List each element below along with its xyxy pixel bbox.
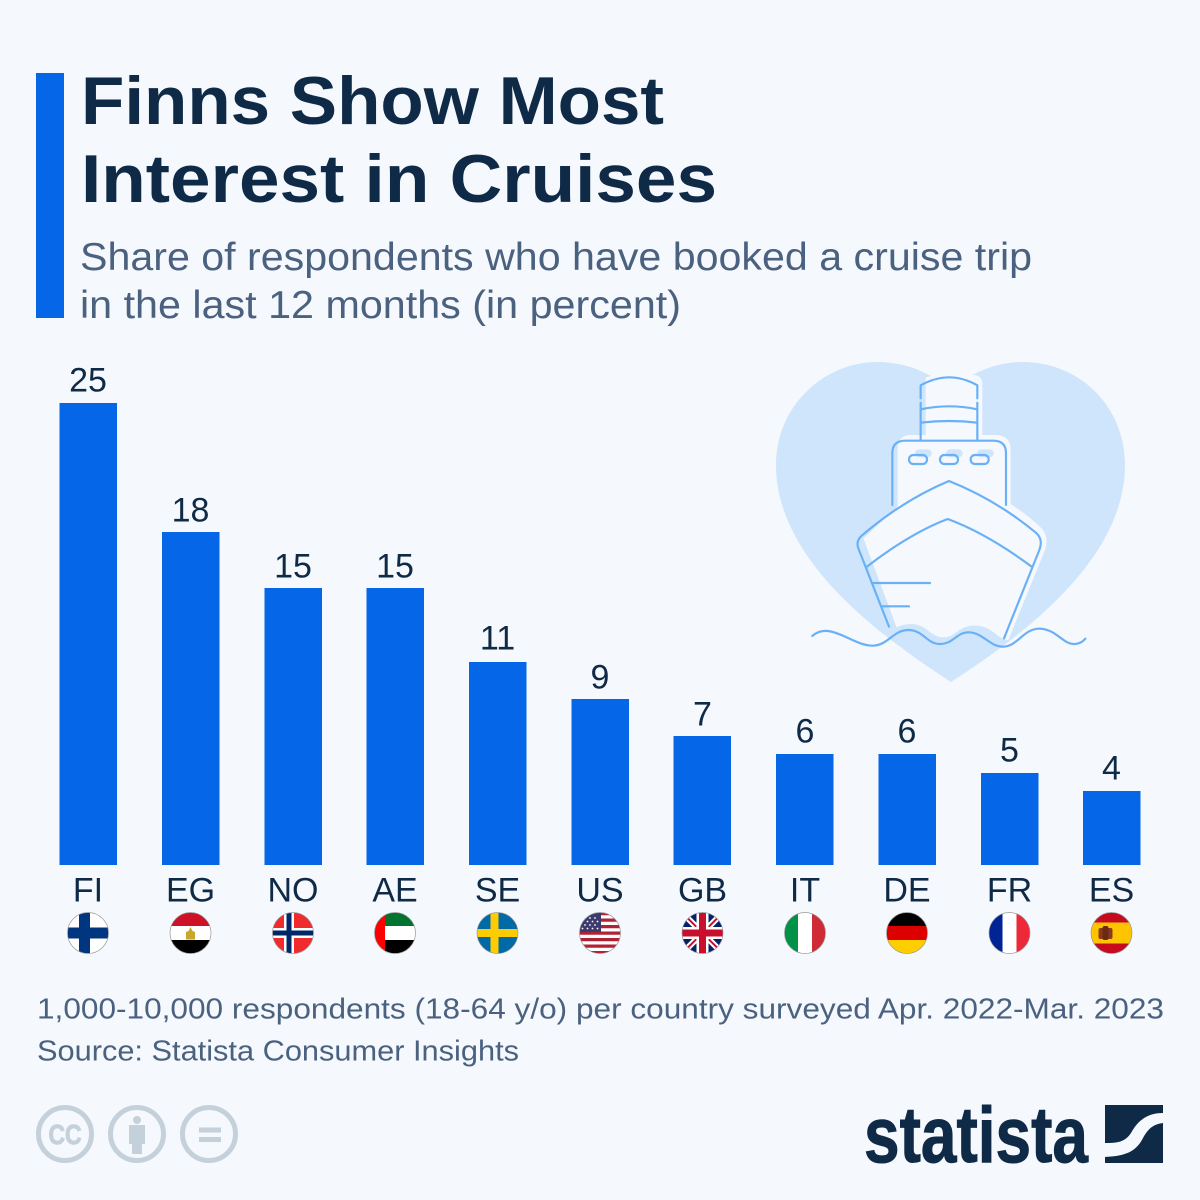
icon: creative commons [38, 1108, 92, 1160]
logo wordmark: statista [864, 1090, 1089, 1179]
value labels: 11 [480, 620, 515, 658]
country labels: FI [73, 872, 103, 910]
bars [60, 403, 1140, 865]
title accent bar [36, 73, 64, 318]
country labels: NO [268, 872, 318, 910]
country labels: FR [987, 872, 1032, 910]
title [81, 63, 717, 217]
value labels: 4 [1102, 750, 1121, 788]
value labels: 6 [796, 712, 814, 750]
icon: attribution [110, 1108, 164, 1160]
flags row [67, 912, 1132, 954]
source note: Source: Statista Consumer Insights [37, 1036, 519, 1068]
flag: Sweden [476, 912, 518, 954]
country labels: AE [372, 872, 418, 910]
flag: Spain [1090, 912, 1132, 954]
value labels [69, 362, 1121, 788]
country labels: GB [678, 872, 727, 910]
flag: Finland [67, 912, 109, 954]
flag: United States [579, 912, 621, 954]
title: Finns Show Most [81, 63, 664, 139]
title: Interest in Cruises [81, 141, 717, 217]
country labels: US [576, 872, 624, 910]
value labels: 9 [591, 658, 609, 696]
country labels [73, 872, 1134, 910]
bar chart [60, 362, 1140, 910]
subtitle: Share of respondents who have booked a cruise trip [80, 236, 1032, 279]
subtitle: in the last 12 months (in percent) [80, 284, 681, 327]
logo mark [1105, 1105, 1163, 1163]
flag: Germany [886, 912, 928, 954]
flag: UAE [374, 912, 416, 954]
flag: Norway [272, 912, 314, 954]
value labels: 18 [172, 492, 209, 530]
flag: United Kingdom [682, 912, 724, 954]
value labels: 15 [376, 548, 414, 586]
illustration: cruise ship in heart [776, 362, 1125, 682]
subtitle [80, 236, 1032, 327]
country labels: SE [475, 872, 520, 910]
licence icons [38, 1108, 236, 1160]
country labels: DE [883, 872, 931, 910]
value labels: 6 [898, 712, 916, 750]
country labels: ES [1089, 872, 1134, 910]
value labels: 5 [1000, 732, 1019, 770]
flag: France [988, 912, 1030, 954]
icon: creative commons: CC [48, 1119, 82, 1150]
source note [37, 994, 1164, 1068]
ship [812, 373, 1085, 647]
flag: Egypt [170, 912, 212, 954]
source note: 1,000-10,000 respondents (18-64 y/o) per country surveyed Apr. 2022-Mar. 2023 [37, 994, 1164, 1026]
value labels: 25 [69, 362, 107, 400]
value labels: 15 [274, 548, 312, 586]
statista logo [864, 1090, 1163, 1179]
value labels: 7 [693, 696, 712, 734]
country labels: EG [166, 872, 215, 910]
flag: Italy [784, 912, 826, 954]
icon: no derivatives [182, 1108, 236, 1160]
country labels: IT [790, 872, 820, 910]
heart [776, 362, 1125, 682]
